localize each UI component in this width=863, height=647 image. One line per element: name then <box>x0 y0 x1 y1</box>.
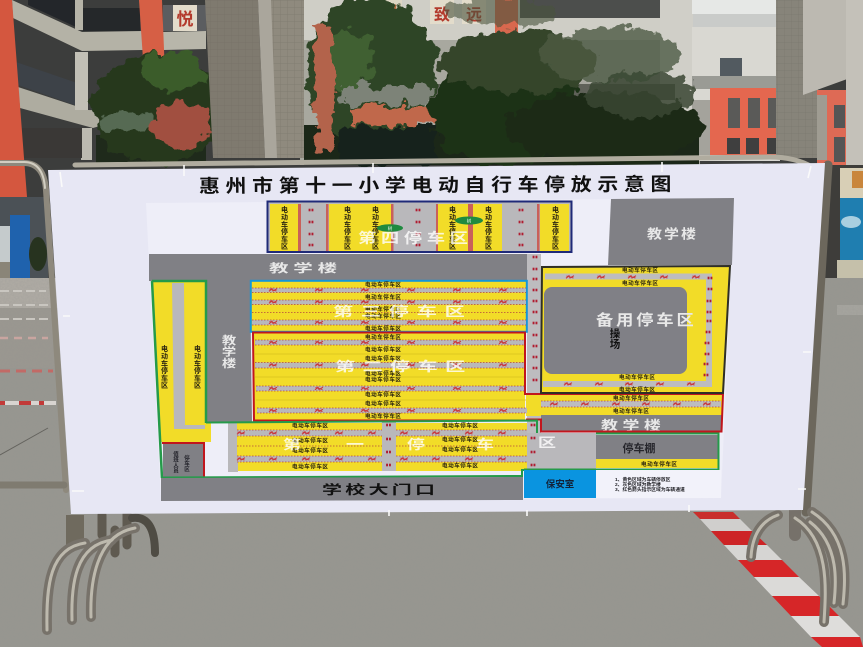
panel: fourth parking zone: 电动车停车区 <box>280 205 288 250</box>
panel: fourth parking zone: 电动车停车区 <box>484 205 492 250</box>
panel: first parking zone: 电动车停车区 <box>292 446 328 454</box>
panel: backup parking zone: 电动车停车区 <box>622 279 658 287</box>
legend: 1、黄色区域为车辆停放区 <box>615 476 671 483</box>
label: first zone: 第 <box>283 437 301 452</box>
teaching building strip <box>541 415 722 433</box>
icon: tree <box>455 216 483 224</box>
panel: third parking zone: 电动车停车区 <box>365 324 401 332</box>
label: first zone <box>283 436 556 452</box>
panel: third parking zone <box>251 280 527 332</box>
label: teaching building side: 学 <box>222 345 236 358</box>
panel: school gate: 学校大门口 <box>322 482 435 497</box>
pillars <box>205 0 818 158</box>
label: first zone: 车 <box>476 437 494 452</box>
label: playground: 操 <box>610 328 620 340</box>
icon: tree <box>377 224 403 232</box>
strip below backup zone <box>541 394 721 415</box>
ground <box>0 278 863 647</box>
teaching building strip: 教学楼 <box>601 418 661 433</box>
strip below backup zone: 电动车停车区 <box>613 407 649 415</box>
panel: second parking zone: 电动车停车区 <box>365 390 401 398</box>
green boundary lines <box>162 420 718 478</box>
map background sheet <box>146 198 734 500</box>
panel: security room: 保安室 <box>546 478 574 490</box>
label: second zone: 第二停车区 <box>335 359 465 374</box>
panel: fourth parking zone <box>268 202 572 252</box>
background photo: school buildings <box>0 0 863 306</box>
building: right slab and column <box>803 0 863 170</box>
label: third zone: 第三停车区 <box>333 304 465 319</box>
panel: second parking zone: 电动车停车区 <box>365 376 401 384</box>
panel: school gate <box>161 477 523 501</box>
icon: tree: 树 <box>388 225 393 232</box>
label: teaching building top: 教学楼 <box>269 261 337 275</box>
label: playground: 场 <box>610 338 621 350</box>
panel: vertical aisle <box>527 254 541 470</box>
panel: left parking strip: 电动车停车区 <box>194 344 201 389</box>
legend: 3、红色箭头指示区域为车辆通道 <box>615 486 685 493</box>
sign: 悦: 悦 <box>176 10 194 29</box>
panel: bicycle shed <box>596 435 718 468</box>
sign: 明 <box>378 0 402 22</box>
panel: staff parking: 值班人员 <box>172 450 179 474</box>
panel: first parking zone: 电动车停车区 <box>442 436 478 444</box>
sign board <box>48 162 825 516</box>
panel: teaching building top right <box>608 198 734 265</box>
panel: security room <box>524 470 596 498</box>
legend <box>596 470 721 498</box>
panel: third parking zone: 电动车停车区 <box>365 293 401 301</box>
panel: second parking zone: 电动车停车区 <box>365 354 401 362</box>
panel: second parking zone: 电动车停车区 <box>365 412 401 420</box>
icon: tree: 树 <box>467 218 472 224</box>
panel: backup parking zone: 电动车停车区 <box>622 266 658 274</box>
sign: 致: 致 <box>434 6 450 24</box>
panel: third parking zone: 电动车停车区 <box>365 312 401 320</box>
sign: 明: 明 <box>383 3 397 19</box>
panel: first parking zone: 电动车停车区 <box>292 436 328 444</box>
panel: third parking zone: 电动车停车区 <box>365 305 401 313</box>
sign: 悦 <box>173 5 197 31</box>
label: first zone: 一 <box>346 438 364 452</box>
label: first zone: 停 <box>407 437 425 452</box>
building: centre white block <box>300 0 700 165</box>
left entrance: noticeboard and bush <box>0 197 48 280</box>
panel: first parking zone: 电动车停车区 <box>442 462 478 470</box>
panel: second parking zone: 电动车停车区 <box>365 370 401 378</box>
panel: bicycle shed: 电动车停车区 <box>641 460 677 468</box>
panel: staff parking <box>162 443 204 477</box>
panel: second parking zone: 电动车停车区 <box>365 333 401 341</box>
zone outline <box>253 332 723 432</box>
panel: left parking strip <box>152 281 211 478</box>
label: teaching building side: 楼 <box>222 357 236 370</box>
panel: bicycle shed: 停车棚 <box>622 441 656 455</box>
panel: fourth parking zone: 电动车停车区 <box>448 205 456 250</box>
right entrance: poster and wall <box>824 165 863 306</box>
cable ties <box>60 162 811 516</box>
panel: first parking zone <box>228 422 596 472</box>
panel: fourth parking zone: 电动车停车区 <box>552 205 559 250</box>
panel: second parking zone: 电动车停车区 <box>365 346 401 354</box>
panel: first parking zone: 电动车停车区 <box>442 446 478 454</box>
panel: second parking zone: 电动车停车区 <box>365 400 401 408</box>
panel: backup parking zone <box>541 266 730 394</box>
panel: left parking strip: 电动车停车区 <box>160 344 168 389</box>
building: right block with sky <box>692 0 782 161</box>
sign: 远: 远 <box>466 6 482 24</box>
playground <box>544 287 687 374</box>
title: 惠州市第十一小学电动自行车停放示意图 <box>199 174 671 197</box>
floor tape: left <box>0 291 56 455</box>
label: first zone: 区 <box>538 436 556 450</box>
trees <box>92 0 705 165</box>
label: teaching building side: 教 <box>222 334 236 347</box>
label: fourth zone: 第四停车区 <box>358 230 468 246</box>
panel: teaching building band <box>149 254 527 423</box>
grey yard <box>527 433 596 470</box>
panel: fourth parking zone: 电动车停车区 <box>344 205 351 250</box>
panel: third parking zone: 电动车停车区 <box>365 280 401 288</box>
label: backup zone: 备用停车区 <box>596 311 694 329</box>
sign: 远 <box>462 0 486 24</box>
panel: backup parking zone: 电动车停车区 <box>619 373 655 381</box>
panel: first parking zone: 电动车停车区 <box>292 422 328 430</box>
panel: backup parking zone: 电动车停车区 <box>619 386 655 394</box>
legend: 2、灰色区域为教学楼 <box>615 481 661 488</box>
barrier frame: stainless tubes and feet <box>0 157 844 630</box>
panel: fourth parking zone: 电动车停车区 <box>372 205 379 250</box>
building: lower-left balconies <box>0 0 206 197</box>
floor tape: right <box>693 512 863 647</box>
panel: second parking zone <box>253 332 723 433</box>
panel: staff parking: 停车区 <box>183 454 190 472</box>
strip below backup zone: 电动车停车区 <box>613 394 649 402</box>
panel: teaching building top right: 教学楼 <box>647 226 696 241</box>
panel: first parking zone: 电动车停车区 <box>292 462 328 470</box>
panel: first parking zone: 电动车停车区 <box>442 422 478 430</box>
sign: 致 <box>430 0 454 24</box>
